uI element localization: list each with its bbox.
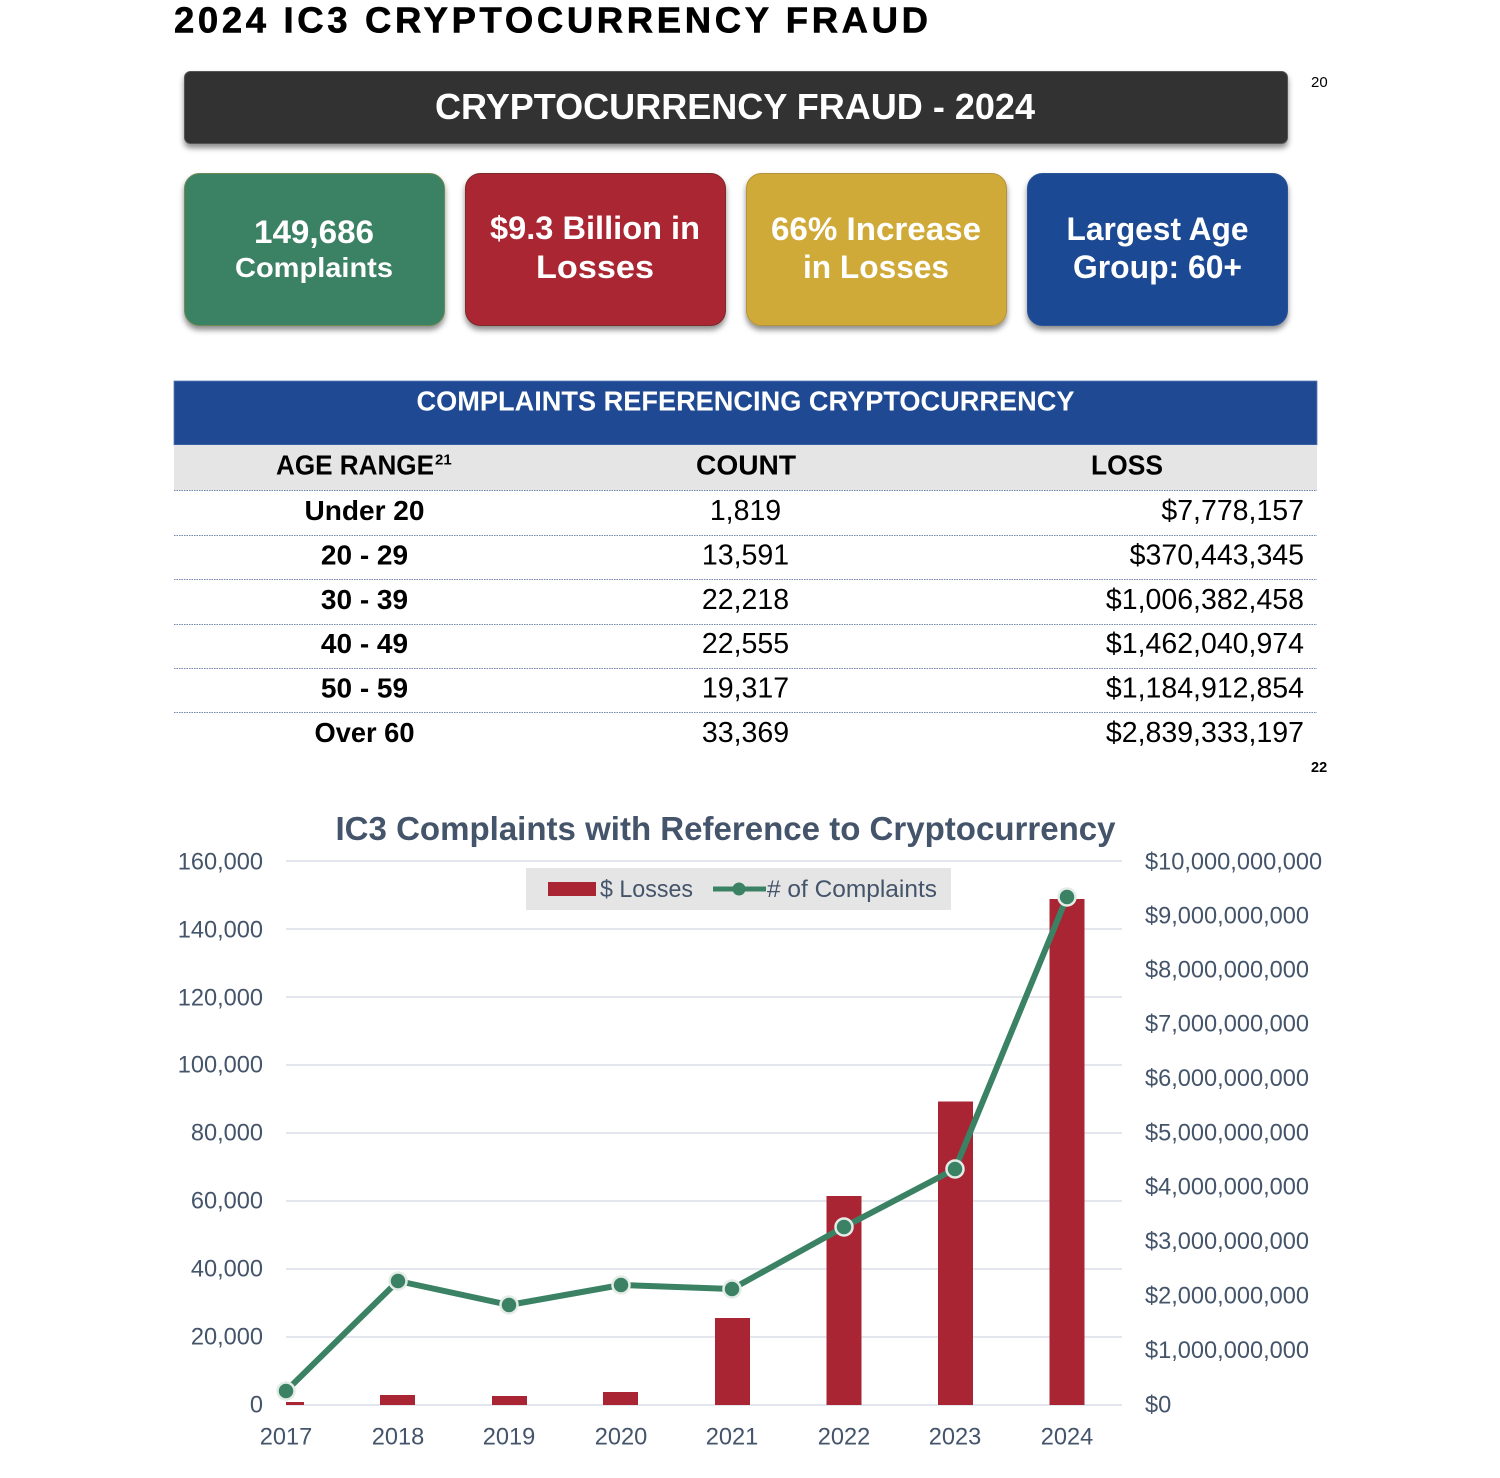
row: 20-29: 13,591 <box>702 540 789 572</box>
x axis labels <box>260 1424 1093 1450</box>
table: complaints referencing cryptocurrency <box>174 381 1317 749</box>
row: 50-59 <box>321 672 1304 704</box>
row: under 20: 1,819 <box>710 495 781 527</box>
table header row: AGE RANGE <box>276 450 434 480</box>
left axis labels: 120,000 <box>178 986 263 1012</box>
legend: # of Complaints <box>767 877 937 903</box>
stat card: complaints <box>184 174 444 326</box>
left axis labels: 60,000 <box>191 1188 263 1214</box>
table header row: COUNT <box>696 450 796 480</box>
x axis labels: 2019 <box>483 1424 535 1450</box>
x axis labels: 2022 <box>818 1424 870 1450</box>
row: under 20: Under 20 <box>304 495 424 526</box>
table title bar: COMPLAINTS REFERENCING CRYPTOCURRENCY <box>416 386 1075 416</box>
row: 30-39: $1,006,382,458 <box>1106 584 1304 616</box>
row: 20-29: 20 - 29 <box>321 540 408 570</box>
right axis labels: $8,000,000,000 <box>1145 958 1309 984</box>
left axis labels: 40,000 <box>191 1256 263 1282</box>
footnote 22: 22 <box>1311 760 1327 776</box>
stat card: losses: $9.3 Billion in <box>490 210 700 246</box>
row: 30-39: 22,218 <box>702 584 789 616</box>
row: over 60 <box>314 717 1304 749</box>
bars: $ losses <box>268 899 1084 1405</box>
stat card: age group <box>1028 174 1288 326</box>
right axis labels: $6,000,000,000 <box>1145 1066 1309 1092</box>
left axis labels: 0 <box>250 1392 263 1418</box>
row: 30-39: 30 - 39 <box>321 584 408 615</box>
row: 30-39 <box>321 584 1304 616</box>
right axis labels: $10,000,000,000 <box>1145 850 1322 876</box>
x axis labels: 2020 <box>595 1424 647 1450</box>
row: 50-59: 50 - 59 <box>321 672 408 704</box>
stat card: losses <box>466 174 726 326</box>
x axis labels: 2024 <box>1041 1424 1093 1450</box>
row: 50-59: $1,184,912,854 <box>1106 672 1304 704</box>
right axis labels: $9,000,000,000 <box>1145 904 1309 930</box>
left axis labels: 20,000 <box>191 1324 263 1350</box>
right axis labels: $2,000,000,000 <box>1145 1284 1309 1310</box>
line: # of complaints <box>278 888 1076 1400</box>
table title bar <box>174 381 1317 445</box>
stat card: complaints: Complaints <box>235 252 393 283</box>
legend: $ Losses <box>600 877 693 903</box>
right axis labels: $7,000,000,000 <box>1145 1012 1309 1038</box>
table header row: 21 <box>435 452 452 468</box>
left axis labels: 160,000 <box>178 850 263 876</box>
right axis labels: $5,000,000,000 <box>1145 1120 1309 1146</box>
right axis labels: $3,000,000,000 <box>1145 1229 1309 1255</box>
left axis labels: 80,000 <box>191 1120 263 1146</box>
right axis labels: $0 <box>1145 1392 1171 1418</box>
banner: cryptocurrency fraud 2024 <box>184 72 1288 144</box>
row: under 20 <box>304 495 1304 527</box>
left axis labels: 140,000 <box>178 918 263 944</box>
stat card: increase <box>746 174 1006 326</box>
table header row: LOSS <box>1091 450 1163 480</box>
x axis labels: 2021 <box>706 1424 758 1450</box>
row: 40-49: 40 - 49 <box>321 628 408 659</box>
chart title: IC3 Complaints with Reference to Cryptocurrency <box>336 810 1116 847</box>
left axis labels <box>178 850 263 1418</box>
right axis labels: $1,000,000,000 <box>1145 1338 1309 1364</box>
row: over 60: Over 60 <box>314 717 414 748</box>
row: 50-59: 19,317 <box>702 672 789 704</box>
table header row <box>174 445 1317 490</box>
banner: cryptocurrency fraud 2024: CRYPTOCURRENCY FRAUD - 2024 <box>435 86 1035 127</box>
chart: IC3 complaints with reference to cryptocurrency <box>178 810 1322 1450</box>
row: 20-29: $370,443,345 <box>1130 540 1304 572</box>
right axis labels: $4,000,000,000 <box>1145 1174 1309 1200</box>
stat card: age group: Group: 60+ <box>1073 249 1242 285</box>
row: 40-49 <box>321 628 1304 660</box>
stat card: increase: 66% Increase <box>771 211 981 247</box>
row: under 20: $7,778,157 <box>1161 495 1304 527</box>
row: over 60: $2,839,333,197 <box>1106 717 1304 749</box>
right axis labels <box>1145 850 1322 1418</box>
row: 40-49: 22,555 <box>702 628 789 660</box>
x axis labels: 2023 <box>929 1424 981 1450</box>
title: 2024 IC3 CRYPTOCURRENCY FRAUD <box>174 0 928 40</box>
footnote 20: 20 <box>1311 74 1328 91</box>
x axis labels: 2018 <box>372 1424 424 1450</box>
left axis labels: 100,000 <box>178 1052 263 1078</box>
row: 40-49: $1,462,040,974 <box>1106 628 1304 660</box>
row: 20-29 <box>321 540 1304 572</box>
stat card: age group: Largest Age <box>1066 211 1248 247</box>
legend <box>526 868 951 910</box>
stat card: complaints: 149,686 <box>254 214 374 250</box>
row: over 60: 33,369 <box>702 717 789 749</box>
stat card: increase: in Losses <box>803 249 949 285</box>
x axis labels: 2017 <box>260 1424 312 1450</box>
stat card: losses: Losses <box>536 249 654 285</box>
